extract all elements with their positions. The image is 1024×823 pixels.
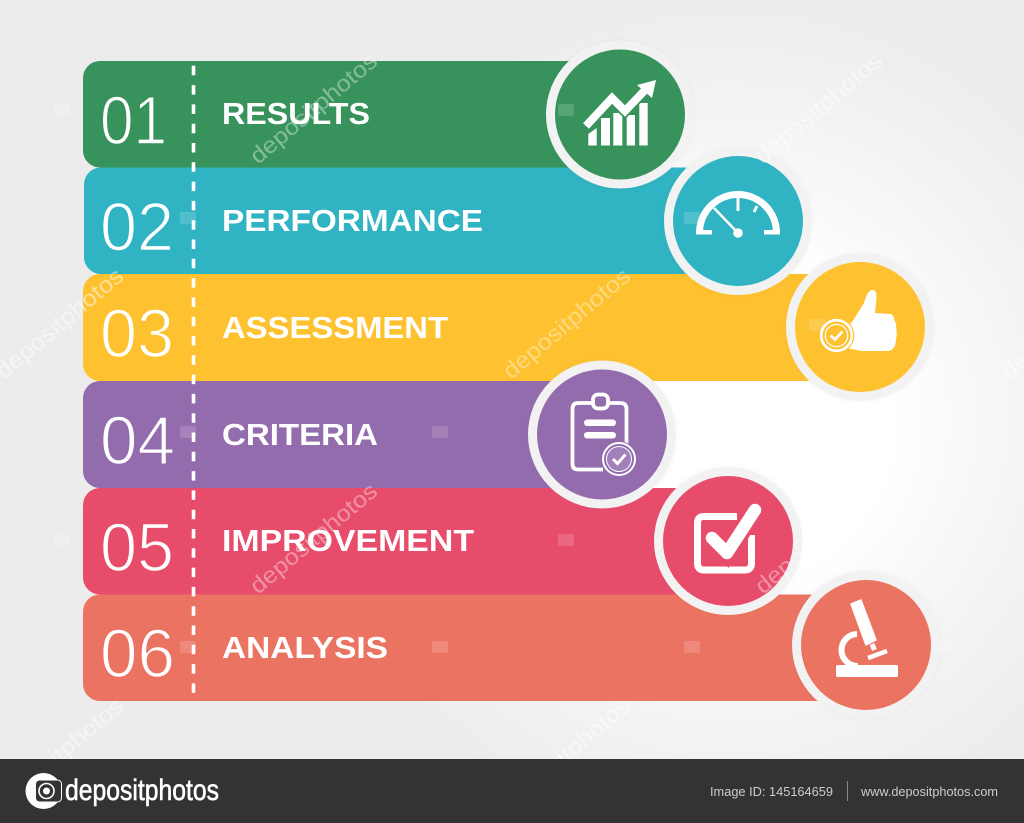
- panel: bar 05 improvement: [83, 488, 728, 594]
- icon badge: clipboard: [528, 360, 676, 508]
- watermarks: depositphotos: [750, 47, 887, 169]
- label: improvement: IMPROVEMENT: [222, 523, 474, 558]
- number 04: 04: [100, 402, 175, 479]
- label: results: RESULTS: [222, 96, 370, 131]
- label: assessment: ASSESSMENT: [222, 310, 448, 345]
- footer image id: Image ID: 145164659: [710, 784, 833, 799]
- dashed divider: [192, 61, 195, 701]
- number 03: 03: [100, 295, 174, 372]
- number 02: 02: [100, 188, 174, 266]
- label: analysis: ANALYSIS: [222, 630, 388, 665]
- label: performance: PERFORMANCE: [222, 203, 483, 238]
- watermarks: depositphotos: [498, 692, 635, 814]
- icon badge: thumbs up: [786, 253, 934, 401]
- icon badge: microscope: [792, 571, 940, 719]
- icon badge: checkbox: [654, 467, 802, 615]
- panel: bar 02 performance: [84, 168, 738, 274]
- panel: bar 04 criteria: [83, 381, 602, 488]
- panel: bar 01 results: [83, 61, 620, 168]
- icon badge: speedometer: [664, 147, 812, 295]
- number 06: 06: [100, 615, 175, 692]
- watermark camera marks: [54, 104, 951, 653]
- footer bar: [0, 759, 1024, 823]
- number 05: 05: [100, 509, 174, 586]
- footer url: www.depositphotos.com: [860, 784, 998, 799]
- footer logo text: depositphotos: [65, 774, 219, 807]
- watermarks: depositphotos: [245, 477, 382, 599]
- panel: bar 03 assessment: [83, 274, 860, 381]
- label: criteria: CRITERIA: [222, 417, 378, 452]
- icon badge: rising chart: [546, 40, 694, 188]
- panel: bar 06 analysis: [83, 594, 866, 701]
- watermarks: depositphotos: [498, 262, 635, 384]
- watermarks: depositphotos: [750, 477, 887, 599]
- number 01: 01: [100, 82, 167, 159]
- footer logo icon: [26, 773, 62, 809]
- watermarks: depositphotos: [245, 47, 382, 169]
